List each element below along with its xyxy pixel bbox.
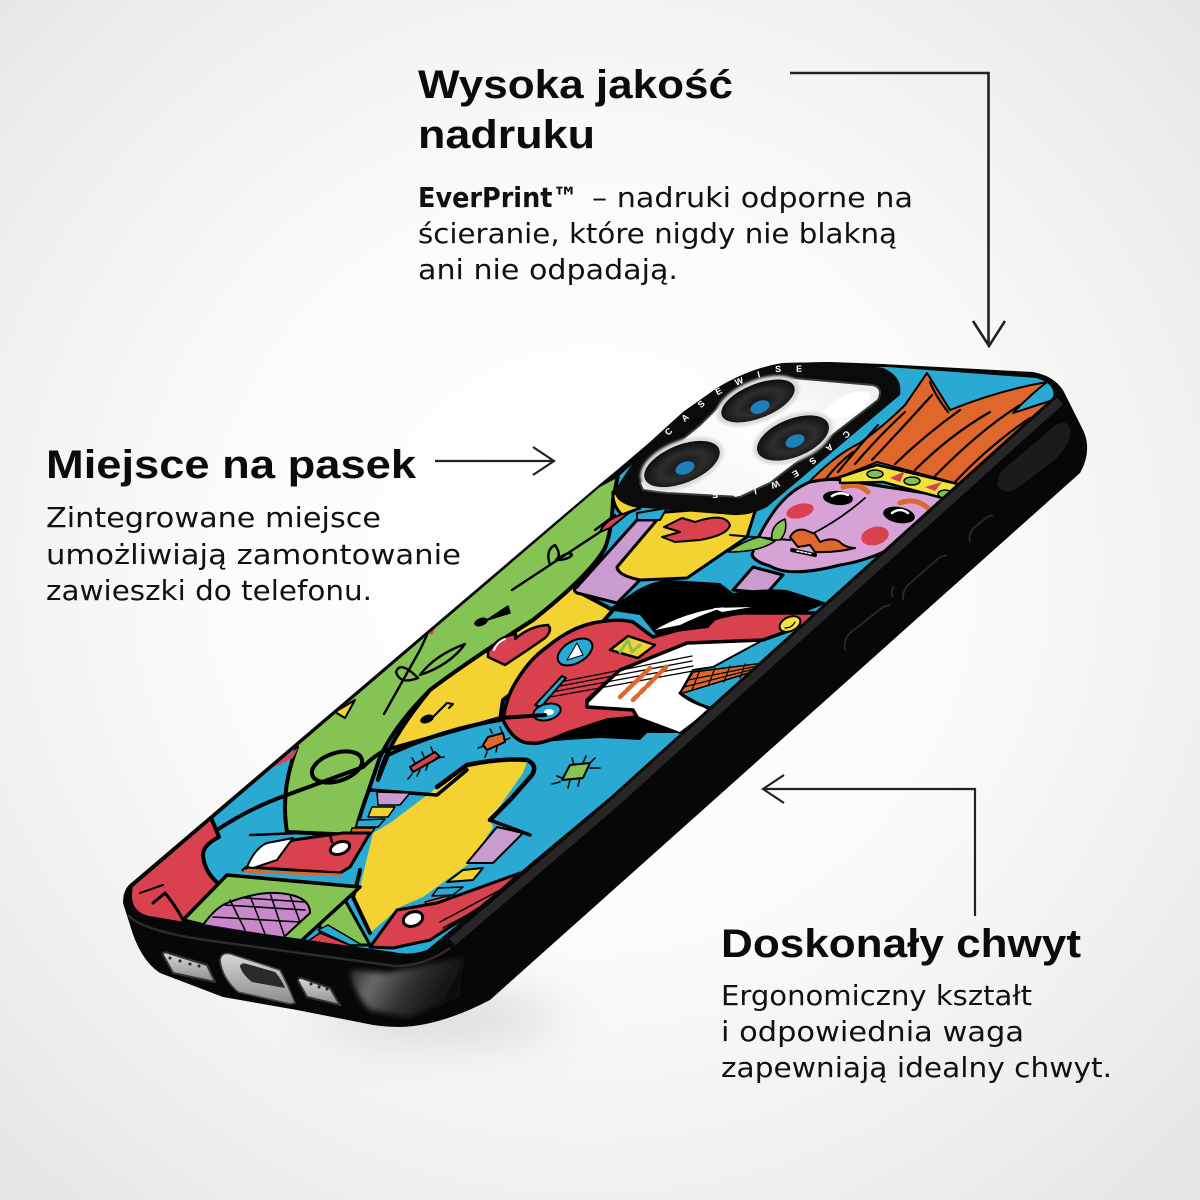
bottom stripes bbox=[305, 933, 362, 950]
cheeks bbox=[786, 503, 814, 519]
camera window bbox=[640, 378, 880, 497]
upper yellow panel bbox=[617, 505, 757, 580]
right leg stripes bbox=[425, 827, 523, 905]
speaker right bbox=[298, 978, 340, 1005]
eyebrows bbox=[843, 485, 928, 508]
guitar badge bbox=[556, 638, 594, 666]
pickups bbox=[535, 676, 566, 707]
jack bbox=[532, 702, 562, 722]
description: zawieszki do telefonu. bbox=[46, 574, 372, 607]
description bbox=[721, 979, 1112, 1084]
printed artwork bbox=[120, 350, 1070, 970]
heading: Miejsce na pasek bbox=[46, 443, 417, 487]
left shoe bbox=[243, 833, 370, 875]
heart bbox=[488, 625, 550, 665]
camera bump bbox=[616, 362, 900, 516]
stems and leaves bbox=[384, 515, 615, 714]
moustache bbox=[790, 530, 855, 552]
description: ani nie odpadają. bbox=[418, 253, 678, 286]
cable bbox=[217, 715, 545, 830]
shirt hem lines bbox=[370, 770, 530, 835]
arrow: left bbox=[435, 447, 554, 475]
description: zapewniają idealny chwyt. bbox=[721, 1051, 1112, 1084]
left leg stripes bbox=[350, 792, 410, 835]
description: Zintegrowane miejsce bbox=[46, 501, 381, 534]
purple arm bbox=[574, 520, 657, 603]
guitar strings bbox=[550, 656, 693, 697]
description bbox=[418, 181, 913, 286]
black shadow under guitar bbox=[550, 718, 678, 742]
side buttons bbox=[845, 515, 993, 650]
description: i odpowiednia waga bbox=[721, 1015, 1024, 1048]
callout: print quality bbox=[418, 63, 913, 286]
neck shadow bbox=[680, 693, 710, 708]
description: Ergonomiczny kształt bbox=[721, 979, 1032, 1012]
heading: nadruku bbox=[418, 113, 595, 157]
white body bbox=[583, 640, 763, 733]
smiley bbox=[778, 615, 802, 633]
phone shadow bbox=[320, 1000, 560, 1036]
heading bbox=[418, 63, 733, 157]
teeth bbox=[792, 550, 815, 555]
zigzag patch bbox=[610, 636, 655, 658]
ring text bottom: CASEWISE bbox=[712, 431, 850, 498]
speaker left bbox=[163, 952, 215, 982]
flower red bbox=[600, 512, 630, 532]
lens right bbox=[745, 401, 841, 475]
description bbox=[46, 501, 461, 607]
description: ścieranie, które nigdy nie blakną bbox=[418, 217, 897, 250]
fretboard bbox=[680, 663, 764, 694]
big yellow figure bbox=[353, 761, 527, 933]
right shoe bbox=[370, 873, 520, 948]
arrow: bottom bbox=[763, 775, 975, 916]
lens top bbox=[709, 365, 807, 437]
description: EverPrint™ bbox=[418, 181, 578, 214]
lens left bbox=[633, 426, 731, 502]
head bbox=[752, 479, 950, 572]
amp bbox=[183, 875, 360, 942]
red corner shape bbox=[132, 818, 221, 922]
glossy bottom corner bbox=[350, 957, 463, 1017]
callout: perfect grip bbox=[721, 922, 1112, 1084]
patch orange bbox=[478, 727, 510, 757]
phone body bbox=[123, 362, 1087, 1027]
callout: strap attachment bbox=[46, 443, 461, 607]
side edge highlights bbox=[128, 401, 1060, 966]
side bump bbox=[997, 423, 1070, 491]
green field bbox=[282, 476, 620, 836]
headband bbox=[840, 465, 962, 500]
yellow band bbox=[378, 548, 613, 780]
heading: Wysoka jakość bbox=[418, 63, 733, 107]
nose line bbox=[810, 498, 865, 535]
hair bbox=[808, 373, 1053, 485]
patch red bbox=[408, 747, 444, 779]
guitar bbox=[503, 607, 820, 743]
purple neck bbox=[733, 567, 783, 593]
music notes bbox=[419, 606, 510, 725]
patch green bbox=[552, 756, 600, 788]
cable loop bbox=[310, 749, 364, 785]
ring text top: CASEWISE bbox=[665, 366, 802, 435]
amp green lower bbox=[320, 900, 370, 945]
hair of guitarist bbox=[607, 580, 827, 640]
phone case illustration bbox=[123, 362, 1088, 1027]
description: umożliwiają zamontowanie bbox=[46, 538, 461, 571]
tulip and stem bbox=[662, 518, 790, 552]
eyes bbox=[823, 490, 853, 506]
description: – nadruki odporne na bbox=[592, 181, 913, 214]
flash highlight bbox=[822, 386, 874, 424]
small red corner bbox=[272, 748, 298, 768]
heading: Doskonały chwyt bbox=[721, 922, 1081, 966]
charging port bbox=[220, 953, 295, 1004]
arrow: top bbox=[790, 73, 1005, 346]
